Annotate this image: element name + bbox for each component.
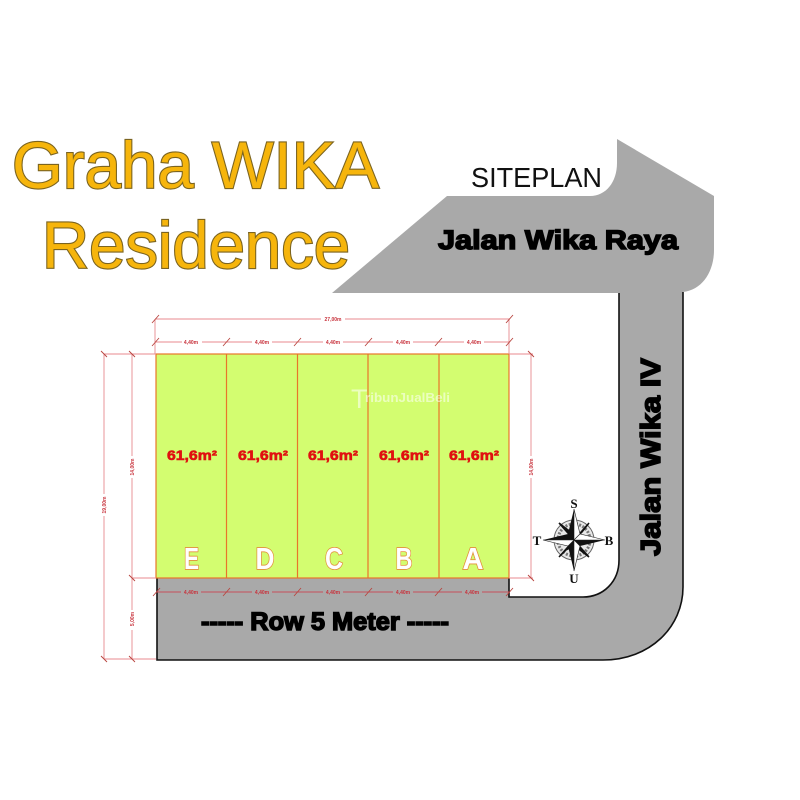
compass letters: [533, 496, 614, 586]
lot letters: D: [256, 541, 274, 576]
dimension labels: [101, 316, 535, 630]
dimension labels: 4,40m: [255, 590, 270, 596]
lot areas: 61,6m²: [167, 447, 217, 463]
label: Jalan Wika IV: Jalan Wika IV: [635, 358, 666, 556]
dimension labels: 4,40m: [184, 340, 199, 346]
dimension labels: 14,00m: [529, 458, 535, 475]
label: Jalan Wika Raya: Jalan Wika Raya: [438, 225, 679, 255]
compass letters: U: [569, 571, 579, 586]
lot fill: [156, 354, 509, 578]
lot areas: [167, 447, 499, 463]
dimension labels: 14,00m: [130, 458, 136, 475]
lot areas: 61,6m²: [238, 447, 288, 463]
lot letters: C: [325, 541, 343, 576]
dimension labels: 19,00m: [102, 496, 108, 513]
icon: compass rose: [533, 496, 614, 586]
dimension labels: 5,00m: [130, 611, 136, 626]
heading: siteplan: SITEPLAN: [471, 162, 602, 193]
watermark logo: T: [351, 384, 368, 414]
dimension lines: [101, 315, 535, 662]
road: Jalan Wika Raya and Jalan Wika IV and Row 5 Meter: [157, 139, 714, 660]
road outlines: [157, 292, 683, 660]
watermark: ribunJualBeli: [365, 390, 450, 405]
lot letters: E: [184, 541, 199, 576]
dimension labels: 4,40m: [326, 590, 341, 596]
title: Residence: [42, 208, 350, 282]
dimension labels: 4,40m: [396, 340, 411, 346]
label: Row 5 Meter: ----- Row 5 Meter -----: [201, 608, 449, 636]
title: Graha WIKA: [12, 128, 379, 202]
title: [12, 128, 379, 282]
dimension labels: 4,40m: [465, 590, 480, 596]
compass letters: T: [533, 533, 542, 548]
dimension labels: 4,40m: [184, 590, 199, 596]
lot areas: 61,6m²: [449, 447, 499, 463]
dimension labels: 4,40m: [467, 340, 482, 346]
compass letters: S: [570, 496, 578, 511]
dimension labels: 4,40m: [326, 340, 341, 346]
lot areas: 61,6m²: [308, 447, 358, 463]
dimension labels: 4,40m: [255, 340, 270, 346]
dimension labels: 27,00m: [325, 317, 342, 323]
dimension labels: 4,40m: [396, 590, 411, 596]
lot letters: B: [396, 541, 412, 576]
lot letters: A: [462, 541, 484, 576]
lots: [156, 354, 509, 578]
compass letters: B: [605, 533, 614, 548]
lot borders: [156, 354, 509, 578]
lot letters: [184, 541, 484, 576]
lot areas: 61,6m²: [379, 447, 429, 463]
